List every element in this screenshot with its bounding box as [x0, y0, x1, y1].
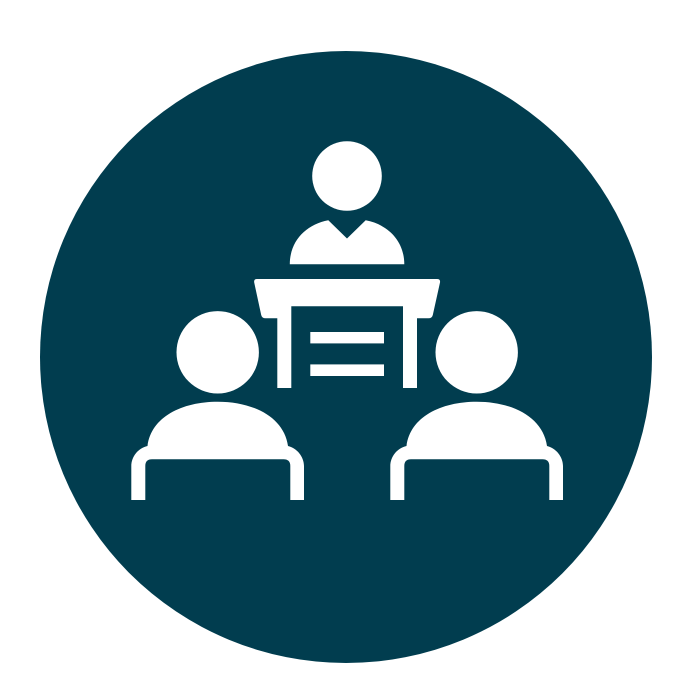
presenter head	[312, 141, 382, 211]
desk upper panel bar	[310, 332, 384, 343]
right attendee body and chair	[390, 402, 563, 500]
right attendee	[390, 311, 563, 500]
left attendee	[131, 311, 304, 500]
desk top and legs	[254, 279, 440, 388]
right attendee head	[436, 311, 518, 393]
left attendee body and chair	[131, 402, 304, 500]
presenter	[290, 141, 404, 264]
background circle	[40, 51, 652, 663]
desk lower panel bar	[310, 364, 384, 376]
left attendee head	[176, 311, 259, 393]
presenter body	[290, 220, 404, 264]
desk	[254, 279, 440, 388]
